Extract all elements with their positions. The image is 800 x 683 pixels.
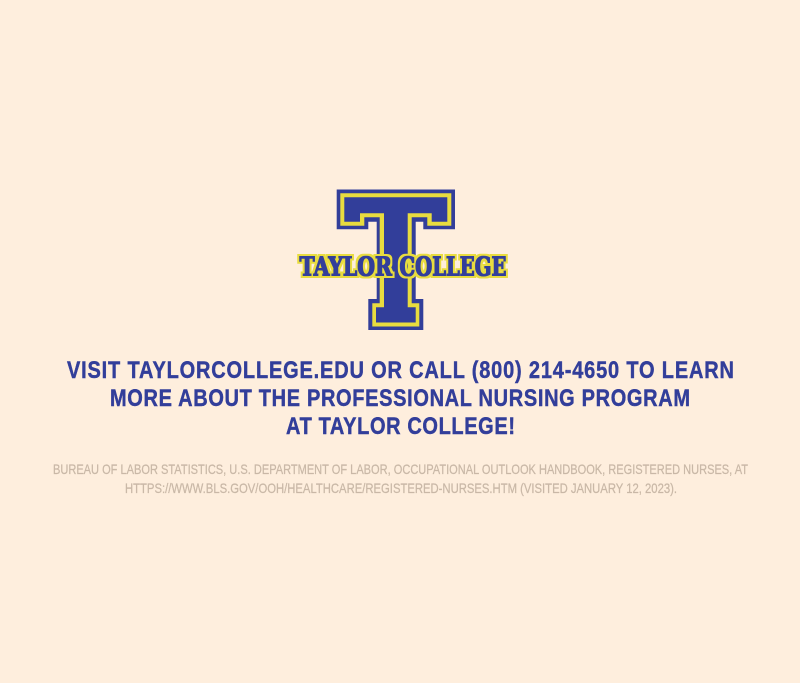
logo wordmark: TAYLOR [300, 252, 393, 282]
logo wordmark [300, 252, 506, 282]
logo: Taylor College varsity T [300, 190, 506, 330]
source citation [53, 461, 748, 496]
logo wordmark: COLLEGE [400, 252, 506, 282]
call to action heading: MORE ABOUT THE PROFESSIONAL NURSING PROGRAM [110, 384, 690, 411]
call to action heading [67, 356, 734, 439]
source citation: HTTPS://WWW.BLS.GOV/OOH/HEALTHCARE/REGISTERED-NURSES.HTM (VISITED JANUARY 12, 2023). [125, 480, 677, 496]
call to action heading: VISIT TAYLORCOLLEGE.EDU OR CALL (800) 214-4650 TO LEARN [67, 356, 734, 383]
call to action heading: AT TAYLOR COLLEGE! [286, 412, 515, 439]
icon: varsity letter T [337, 190, 455, 330]
